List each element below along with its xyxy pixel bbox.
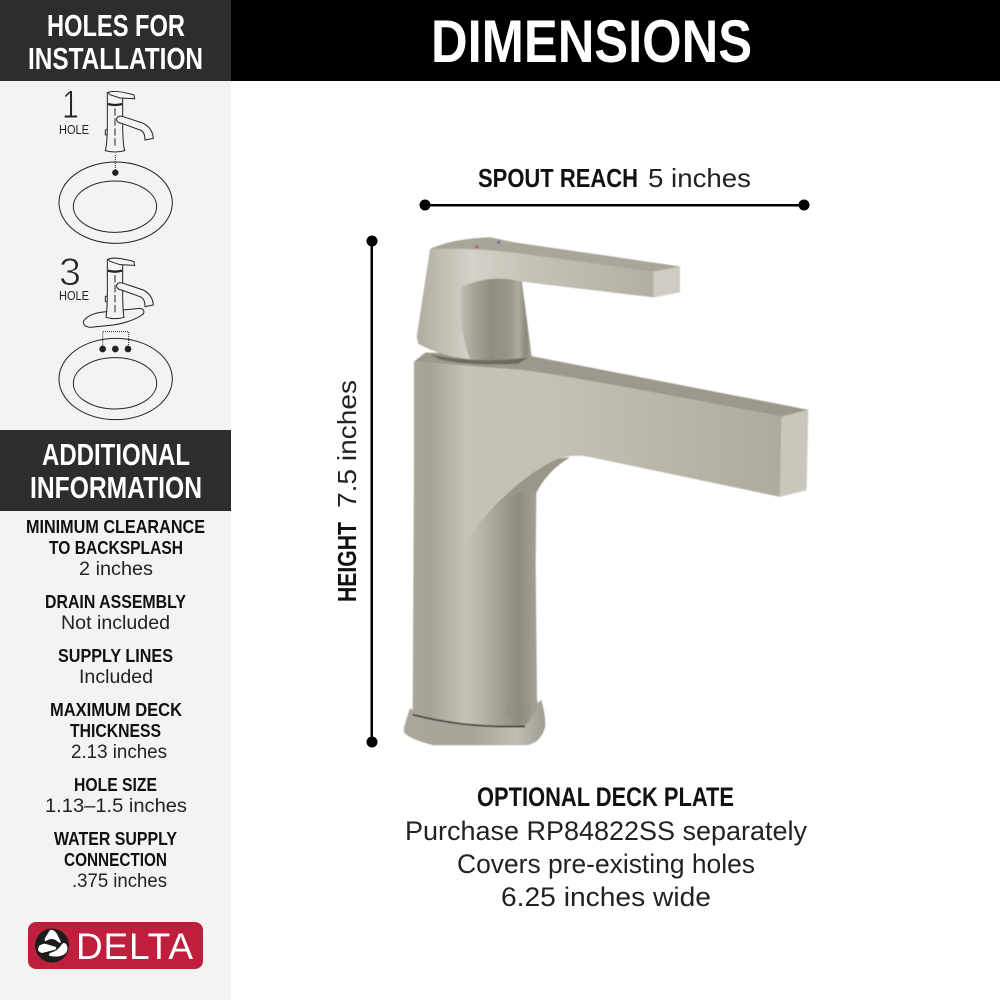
label: spout reach: 5 inches <box>648 163 751 193</box>
handle top face <box>430 237 680 272</box>
label: height: 7.5 inches <box>332 380 362 508</box>
handle lever <box>417 237 680 359</box>
base shadow line <box>413 715 525 727</box>
logo: delta: DELTA <box>76 926 193 967</box>
icon: three hole faucet with deck plate and sink <box>59 258 172 420</box>
handle cone <box>453 278 532 360</box>
text: minimum clearance to backsplash: TO BACKSPLASH <box>49 538 183 558</box>
handle end face <box>653 266 680 297</box>
spout top face <box>414 352 808 417</box>
text: optional deck plate <box>405 782 807 912</box>
header: holes for installation <box>0 0 231 81</box>
header: additional information: ADDITIONAL <box>42 437 190 472</box>
text: water supply connection <box>54 829 177 892</box>
hot and cold dots <box>475 245 478 249</box>
text: optional deck plate: 6.25 inches wide <box>501 882 711 912</box>
handle collar shadow <box>430 354 528 364</box>
label: 1 hole <box>59 83 89 137</box>
arrow: spout reach dimension line <box>420 200 810 210</box>
text: minimum clearance to backsplash: MINIMUM CLEARANCE <box>26 517 205 537</box>
engraved brand mark: DELT <box>507 703 532 719</box>
text: supply lines: SUPPLY LINES <box>58 646 173 666</box>
header: additional information: INFORMATION <box>30 470 202 505</box>
text: optional deck plate: OPTIONAL DECK PLATE <box>477 782 734 812</box>
label: 1 hole: HOLE <box>59 122 89 137</box>
label: 3 hole: 3 <box>59 251 81 294</box>
label: 3 hole: HOLE <box>59 288 89 303</box>
text: water supply connection: CONNECTION <box>64 850 167 870</box>
text: supply lines: Included <box>79 667 153 688</box>
base plate <box>404 700 545 745</box>
label: 1 hole: 1 <box>62 83 79 127</box>
arrow: height dimension line <box>366 236 378 748</box>
text: minimum clearance to backsplash <box>26 517 205 580</box>
logo: delta <box>28 922 203 969</box>
icon: single hole faucet and sink <box>59 91 172 243</box>
label: height: HEIGHT <box>332 522 362 602</box>
label: 3 hole <box>59 251 89 303</box>
text: maximum deck thickness: MAXIMUM DECK <box>50 700 182 720</box>
text: maximum deck thickness: 2.13 inches <box>71 742 167 763</box>
faucet column <box>413 461 537 726</box>
title: dimensions: DIMENSIONS <box>431 8 752 75</box>
label: height <box>332 380 362 602</box>
text: drain assembly: DRAIN ASSEMBLY <box>45 592 186 612</box>
text: hole size: 1.13–1.5 inches <box>45 796 187 817</box>
text: supply lines <box>58 646 173 688</box>
text: drain assembly: Not included <box>61 613 170 634</box>
label: spout reach <box>478 163 751 193</box>
text: optional deck plate: Purchase RP84822SS separately <box>405 816 807 846</box>
spout end face <box>780 410 808 497</box>
text: water supply connection: WATER SUPPLY <box>54 829 177 849</box>
header: additional information <box>0 430 231 511</box>
header: holes for installation: HOLES FOR <box>47 8 185 43</box>
title: dimensions <box>231 0 1000 81</box>
text: hole size: HOLE SIZE <box>74 775 157 795</box>
text: hole size <box>45 775 187 817</box>
label: spout reach: SPOUT REACH <box>478 163 638 193</box>
text: water supply connection: .375 inches <box>72 871 167 892</box>
text: drain assembly <box>45 592 186 634</box>
header: holes for installation: INSTALLATION <box>28 41 203 76</box>
spout underside curve <box>465 457 570 542</box>
text: maximum deck thickness: THICKNESS <box>70 721 161 741</box>
text: minimum clearance to backsplash: 2 inches <box>79 559 153 580</box>
text: maximum deck thickness <box>50 700 182 763</box>
spout side face <box>414 362 782 564</box>
text: optional deck plate: Covers pre-existing holes <box>457 849 755 879</box>
faucet illustration <box>404 237 808 745</box>
panel: left sidebar background <box>0 0 231 1000</box>
